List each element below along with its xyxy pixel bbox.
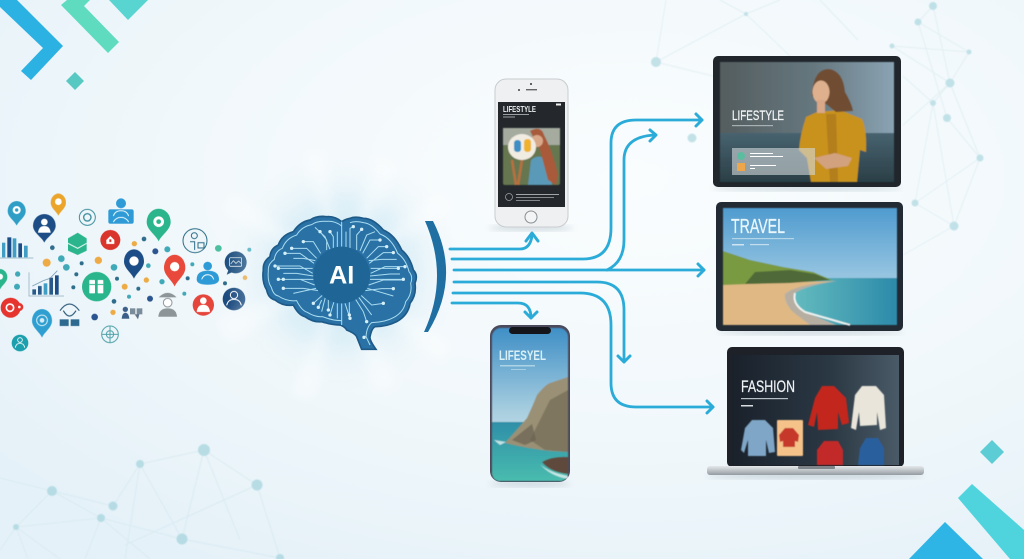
brain silhouette [263,216,416,349]
network decoration: bottom-left [0,444,284,559]
arrow to bottom phone [452,303,537,318]
arrow to lifestyle tablet [452,114,702,259]
icon: round badges [1,209,247,351]
clothing items [741,386,886,465]
tablet headline: TRAVEL [731,216,785,238]
bracket arc [424,221,446,332]
arrow to top phone [450,233,538,249]
AI brain [263,216,416,349]
fashion laptop [707,347,924,479]
arrow to travel tablet [454,264,704,276]
top phone [489,79,573,231]
glow behind brain [215,150,460,400]
branch arrow downward [454,282,630,362]
woman [799,110,866,182]
laptop headline: FASHION [741,377,795,396]
data icon cloud [0,194,251,351]
scattered dots [14,237,251,320]
flow arrows [450,114,713,413]
phone headline: LIFESTYLE [503,104,536,114]
travel tablet [716,202,903,335]
branch arrow upward [607,130,656,270]
bottom phone [490,325,570,487]
tablet headline: LIFESTYLE [732,107,784,123]
icon: map pins [0,194,185,338]
midline [340,222,343,325]
circuit traces [275,227,405,322]
decoration: bottom-right shapes [909,440,1024,559]
phone photo [503,128,560,185]
bar chart: upper [0,237,33,258]
lifestyle tablet [712,56,902,191]
network decoration: top-right [651,0,984,255]
decoration: top-left chevrons [0,0,148,90]
AI core [313,247,370,303]
AI label: AI [329,261,354,289]
bar chart: lower [29,271,64,296]
info card [732,148,815,175]
phone headline: LIFESYEL [499,348,546,363]
arrow to laptop [453,293,713,413]
icon: people [60,198,219,326]
